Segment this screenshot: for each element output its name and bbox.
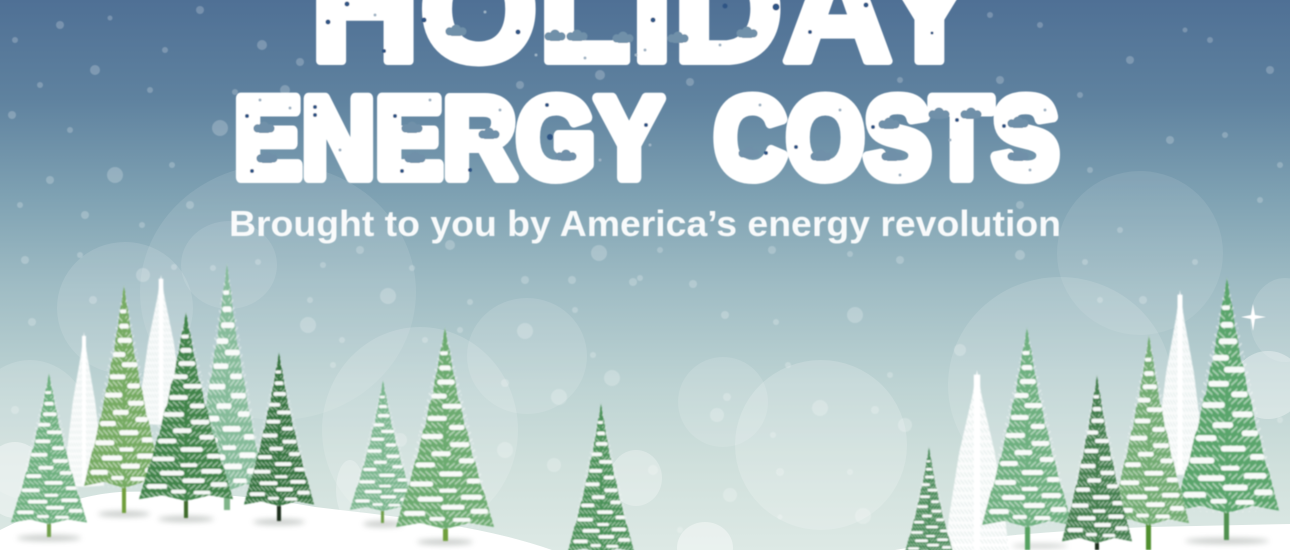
tree: tall pale right (982, 327, 1072, 550)
navy speckles on title letters (245, 2, 1006, 173)
title line: COSTS: COSTS (714, 74, 1059, 202)
tree: yellow green right (1109, 335, 1189, 550)
tree: pale tall (189, 263, 265, 510)
tree: centre foreground (568, 403, 634, 550)
tree: far left (11, 373, 87, 537)
tree: darkest (244, 352, 314, 521)
grey speckles on title letters (258, 10, 1046, 176)
forest: right group (904, 277, 1279, 550)
forest: left group (11, 263, 634, 550)
title (234, 0, 1059, 202)
tree: small dark right (904, 447, 954, 550)
white tree right 1 (945, 370, 1009, 550)
tree: far right tall (1175, 277, 1279, 540)
tree: middle tall (396, 327, 494, 541)
title line: ENERGY: ENERGY (234, 74, 663, 202)
snow caps on title letters (253, 25, 1029, 163)
tree: dark right (1062, 375, 1132, 550)
icon: sparkle star (1241, 304, 1266, 331)
tree shadows on snow (17, 511, 1269, 548)
subtitle: Brought to you by America’s energy revolution (229, 203, 1061, 244)
tree: yellow green (84, 285, 164, 513)
tree: dark green center (139, 312, 233, 518)
white tree left 2 (138, 275, 184, 425)
white tree right 2 (1155, 290, 1205, 475)
white tree left 1 (64, 332, 104, 487)
tree: pale middle (350, 380, 416, 523)
bokeh light circles (0, 164, 1290, 550)
snow-covered hills (0, 492, 1290, 550)
